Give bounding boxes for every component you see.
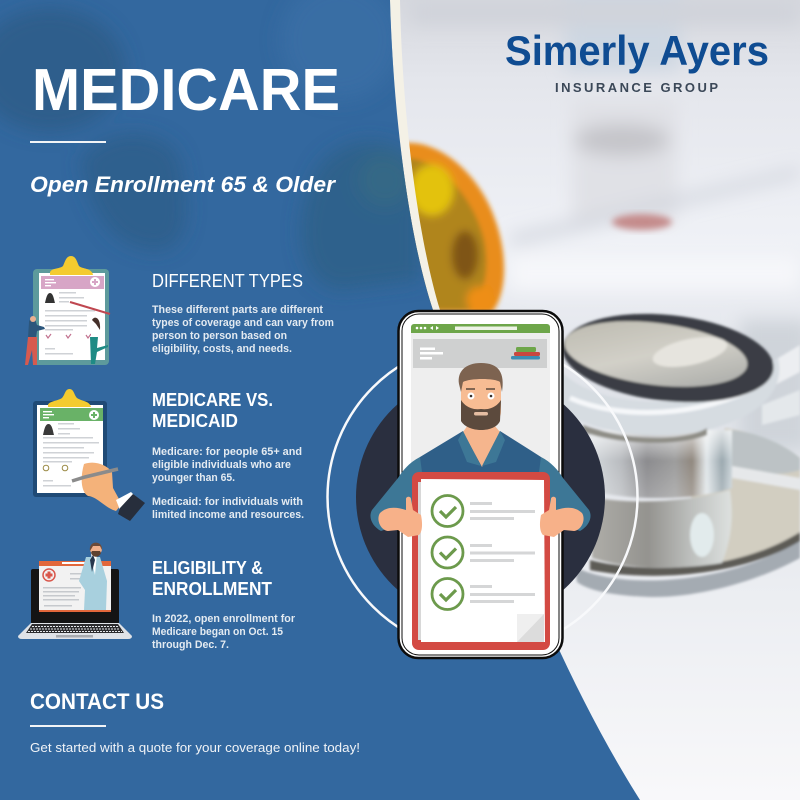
circle backdrop [328, 342, 638, 652]
lower cone [592, 490, 732, 568]
body text: These different parts are different [152, 304, 323, 316]
section: medicare vs medicaid [33, 389, 304, 521]
icon: laptop with doctor [18, 543, 132, 639]
neck and collar [463, 425, 500, 467]
body text: Medicare began on Oct. 15 [152, 626, 283, 638]
body text: through Dec. 7. [152, 639, 229, 651]
checklist board [412, 472, 550, 650]
body text: Medicare: for people 65+ and [152, 446, 302, 458]
neck [590, 430, 732, 498]
phone illustration [370, 311, 591, 658]
shirt and sleeves [404, 431, 558, 490]
man [370, 363, 591, 531]
phone body [398, 311, 562, 658]
body text: limited income and resources. [152, 509, 304, 521]
body text [152, 613, 296, 651]
body text: Medicaid: for individuals with [152, 496, 303, 508]
browser bar [411, 324, 550, 333]
body text [152, 446, 304, 521]
section: eligibility and enrollment [18, 543, 296, 651]
logo [505, 27, 769, 95]
icon: green clipboard with writing hand [33, 389, 145, 521]
blurred pill bottle cap [405, 143, 504, 314]
person left [28, 319, 45, 338]
heading: MEDICAID [152, 411, 238, 431]
body text: younger than 65. [152, 472, 235, 484]
body text: types of coverage and can vary from [152, 317, 334, 329]
icon: pink clipboard with two people [25, 256, 110, 365]
body text: eligibility, costs, and needs. [152, 343, 292, 355]
checklist row 2 [432, 537, 535, 568]
body text: person to person based on [152, 330, 287, 342]
chest piece disc [690, 428, 800, 567]
body text: eligible individuals who are [152, 459, 291, 471]
background photo: blurred medical desk with stethoscope and pill bottle [380, 0, 800, 800]
page fold [517, 614, 544, 642]
ribbed base [575, 540, 800, 597]
screen [411, 333, 550, 483]
left hand [378, 497, 422, 537]
checklist row 3 [432, 578, 535, 610]
subtitle: Open Enrollment 65 & Older [30, 172, 336, 197]
heading [152, 390, 273, 431]
section: different types [25, 256, 334, 365]
right hand [540, 497, 584, 537]
title: MEDICARE [32, 57, 340, 123]
heading [152, 558, 272, 599]
heading: DIFFERENT TYPES [152, 271, 303, 291]
body text: In 2022, open enrollment for [152, 613, 296, 625]
checklist row 1 [432, 496, 535, 526]
blurred red mark [612, 214, 672, 230]
heading: ELIGIBILITY & [152, 558, 263, 578]
heading: MEDICARE VS. [152, 390, 273, 410]
stethoscope [558, 304, 800, 597]
body text [152, 304, 334, 355]
blue panel [0, 0, 640, 800]
silver rim [562, 358, 779, 435]
head [461, 375, 501, 424]
contact heading: CONTACT US [30, 689, 164, 714]
dark ring [564, 312, 775, 404]
person right [91, 320, 100, 338]
contact text: Get started with a quote for your coverage online today! [30, 740, 360, 755]
logo: Simerly Ayers [505, 27, 769, 74]
header band with menu and books [413, 339, 547, 368]
logo: INSURANCE GROUP [555, 80, 718, 95]
heading: ENROLLMENT [152, 579, 272, 599]
